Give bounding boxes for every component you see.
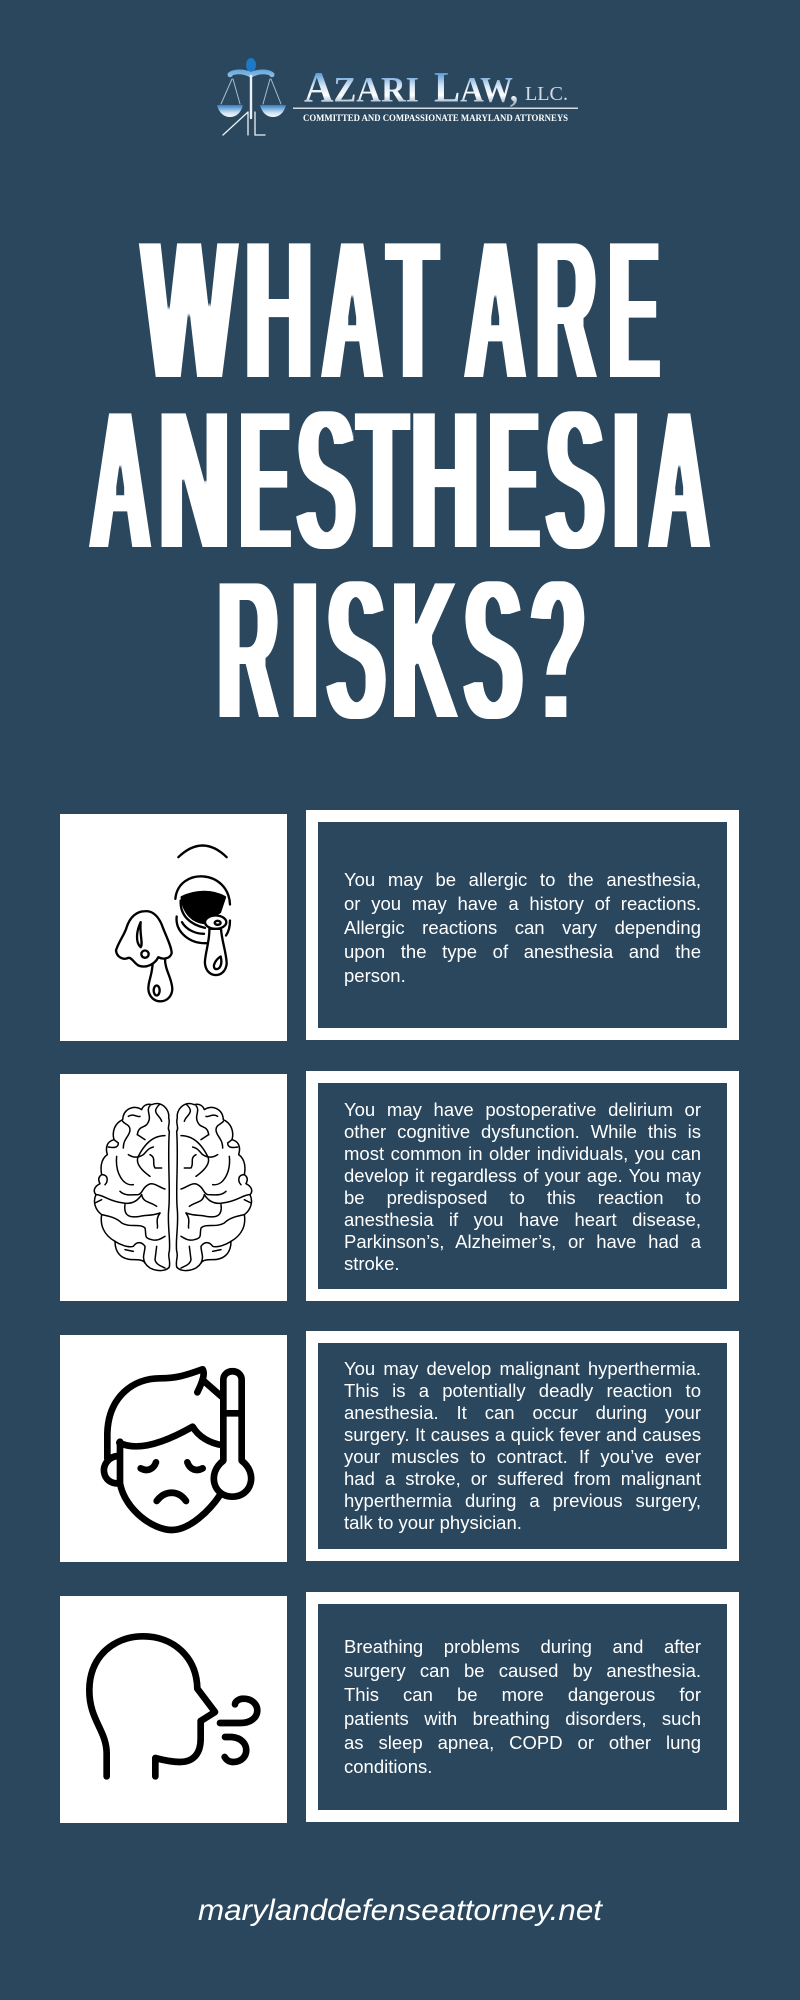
text: malignant hyperthermia	[344, 1358, 701, 1533]
title: A	[465, 197, 526, 424]
text: malignant hyperthermia: surgery. It causes a quick fever and causes	[344, 1424, 701, 1445]
text: breathing problems: as sleep apnea, COPD or other lung	[344, 1732, 701, 1753]
text: malignant hyperthermia: anesthesia. It can occur during your	[344, 1402, 701, 1423]
text: allergic reaction: or you may have a history of reactions.	[344, 893, 701, 914]
title: E	[240, 367, 290, 594]
text: allergic reaction: upon the type of anesthesia and the	[344, 941, 701, 962]
icon: head exhaling	[86, 1633, 261, 1780]
title: R	[536, 197, 596, 424]
text: breathing problems: surgery can be caused by anesthesia.	[344, 1660, 701, 1681]
title: S	[464, 537, 522, 764]
icon: watery eye and runny nose	[114, 844, 232, 1002]
panel: breathing icon	[60, 1596, 287, 1823]
title: S	[297, 367, 355, 594]
title: T	[388, 197, 437, 424]
panel: breathing text	[306, 1592, 739, 1822]
panel: delirium icon	[60, 1074, 287, 1301]
panel: delirium text	[306, 1071, 739, 1301]
title: A	[322, 197, 383, 424]
title: H	[245, 197, 313, 424]
logo: Azari Law: LLC.	[525, 83, 568, 105]
title: N	[159, 367, 230, 594]
text: breathing problems: conditions.	[344, 1756, 432, 1777]
title: S	[327, 537, 385, 764]
title	[89, 197, 710, 764]
title: R	[218, 537, 278, 764]
title: S	[546, 367, 604, 594]
logo: Azari Law: LAW,	[434, 64, 518, 112]
text: postoperative delirium: anesthesia if you have heart disease,	[344, 1209, 701, 1230]
text: postoperative delirium: develop it regardless of your age. You may	[344, 1165, 701, 1186]
icon: sick face with thermometer	[100, 1366, 254, 1534]
text: postoperative delirium: other cognitive dysfunction. While this is	[344, 1121, 701, 1142]
title: E	[488, 367, 538, 594]
panel: allergic reaction text	[306, 810, 739, 1040]
logo: Azari Law: COMMITTED AND COMPASSIONATE MARYLAND ATTORNEYS	[303, 114, 568, 124]
text: postoperative delirium: Parkinson’s, Alzheimer’s, or have had a	[344, 1231, 701, 1252]
title: H	[411, 367, 479, 594]
text: malignant hyperthermia: talk to your physician.	[344, 1512, 522, 1533]
text: malignant hyperthermia: hyperthermia during a previous surgery,	[344, 1490, 701, 1511]
panel: hyperthermia icon	[60, 1335, 287, 1562]
title: E	[609, 197, 659, 424]
text: breathing problems: Breathing problems during and after	[344, 1636, 701, 1657]
text: allergic reaction: You may be allergic to the anesthesia,	[344, 869, 701, 890]
text: breathing problems	[344, 1636, 701, 1777]
panel: allergic reaction icon	[60, 814, 287, 1041]
icon: brain	[94, 1102, 252, 1272]
text: malignant hyperthermia: your muscles to contract. If you’ve ever	[344, 1446, 701, 1467]
footer: website: marylanddefenseattorney.net	[198, 1894, 604, 1927]
title: I	[291, 537, 319, 764]
text: malignant hyperthermia: had a stroke, or suffered from malignant	[344, 1468, 701, 1489]
text: allergic reaction: Allergic reactions can vary depending	[344, 917, 701, 938]
text: postoperative delirium: stroke.	[344, 1253, 400, 1274]
title: T	[358, 367, 407, 594]
logo: Azari Law	[217, 58, 578, 136]
title: K	[392, 537, 457, 764]
text: allergic reaction: person.	[344, 965, 406, 986]
text: postoperative delirium: most common in older individuals, you can	[344, 1143, 701, 1164]
panel: hyperthermia text	[306, 1331, 739, 1561]
title: ?	[530, 537, 585, 764]
text: postoperative delirium: You may have postoperative delirium or	[344, 1099, 701, 1120]
text: postoperative delirium	[344, 1099, 702, 1274]
title: A	[90, 367, 150, 594]
text: breathing problems: This can be more dangerous for	[344, 1684, 701, 1705]
text: malignant hyperthermia: This is a potentially deadly reaction to	[344, 1380, 701, 1401]
text: postoperative delirium: be predisposed to this reaction to	[344, 1187, 701, 1208]
title: I	[612, 367, 640, 594]
title: A	[649, 367, 710, 594]
text: breathing problems: patients with breathing disorders, such	[344, 1708, 701, 1729]
logo: Azari Law: AZARI	[304, 64, 419, 112]
title: W	[142, 197, 236, 424]
text: allergic reaction	[344, 869, 701, 986]
text: malignant hyperthermia: You may develop malignant hyperthermia.	[344, 1358, 701, 1379]
